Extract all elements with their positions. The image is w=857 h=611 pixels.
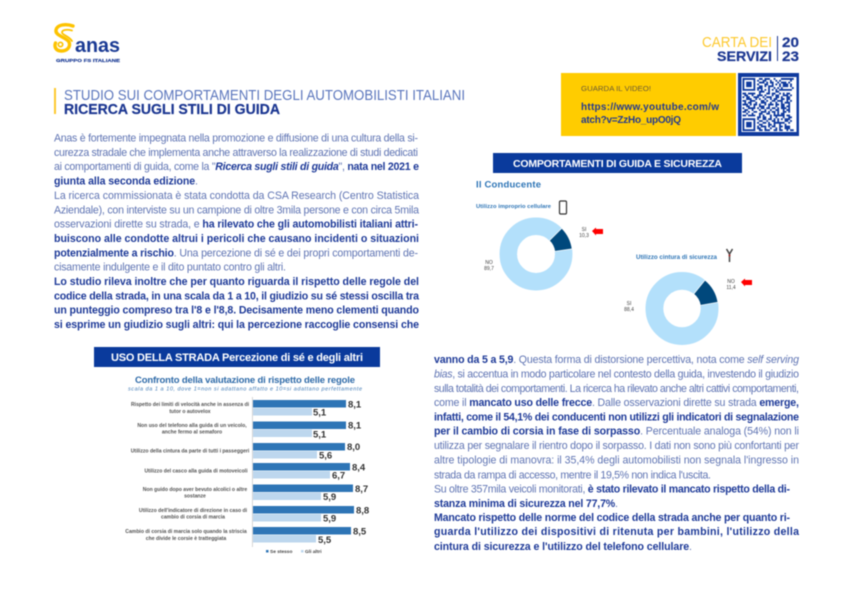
chart legend	[266, 549, 322, 555]
logo tagline: GRUPPO FS ITALIANE	[56, 58, 121, 64]
text block: right column: infatti, come il 54,1% dei conducenti non utilizzi gli indicatori di segnalazione	[434, 411, 799, 423]
row: uso del telefono: anche fermo al semaforo	[162, 430, 222, 436]
row: alcolici: Non guido dopo aver bevuto alcolici o altre	[143, 487, 247, 493]
label: si	[579, 227, 589, 239]
icon: seatbelt	[726, 249, 732, 262]
text block: left column: ai comportamenti di guida, come la "Ricerca sugli stili di guida", nata nel 2021 e	[54, 161, 419, 173]
label: no	[484, 260, 494, 272]
row: uso del telefono	[137, 420, 362, 440]
label: si: SI	[582, 227, 586, 233]
title	[54, 88, 465, 118]
video callout: atch?v=ZzHo_upO0jQ	[581, 115, 681, 126]
row: limiti di velocità: Rispetto dei limiti di velocità anche in assenza di	[131, 402, 250, 408]
carta dei servizi badge: SERVIZI	[717, 48, 772, 64]
carta dei servizi badge: 20	[782, 34, 799, 50]
text block: left column: curezza stradale che implementa anche attraverso la realizzazione di studi dedicati	[54, 147, 418, 159]
text block: right column: stanza minima di sicurezza nel 77,7%.	[434, 498, 618, 510]
text block: left column: Lo studio rileva inoltre che per quanto riguarda il rispetto delle regole del	[54, 276, 419, 288]
banner: comportamenti di guida	[493, 153, 742, 173]
donut chart: utilizzo cintura	[624, 249, 752, 336]
row: indicatore di direzione: 5,9	[323, 514, 336, 524]
icon: phone	[560, 201, 566, 214]
text block: left column: potenzialmente a rischio. Una percezione di sé e dei propri comportamenti de-	[54, 247, 418, 259]
title: STUDIO SUI COMPORTAMENTI DEGLI AUTOMOBILISTI ITALIANI	[64, 88, 465, 104]
label: si: SI	[627, 301, 631, 307]
text block: right column: utilizza per segnalare il rientro dopo il sorpasso. I dati non sono più confortanti per	[434, 440, 799, 452]
text block: right column: cintura di sicurezza e l'utilizzo del telefono cellulare.	[434, 541, 692, 553]
label: si	[624, 301, 634, 313]
label: no: 11,4	[726, 285, 736, 291]
row: alcolici: sostanze	[184, 494, 206, 500]
carta dei servizi badge	[702, 34, 799, 64]
row: cambio di corsia: Cambio di corsia di marcia solo quando la striscia	[125, 529, 247, 535]
logo wordmark: anas	[75, 35, 120, 57]
text block: right column: per il cambio di corsia in fase di sorpasso. Percentuale analoga (54%) non li	[434, 426, 799, 438]
row: indicatore di direzione: Utilizzo dell'indicatore di direzione in caso di	[139, 508, 248, 514]
carta dei servizi badge: CARTA DEI	[702, 35, 772, 51]
label: si: 10,3	[579, 233, 589, 239]
row: limiti di velocità: 5,1	[313, 408, 327, 418]
chart legend: Gli altri	[305, 549, 322, 555]
text block: left column: buiscono alle condotte altrui i pericoli che causano incidenti o situazioni	[54, 233, 419, 245]
row: cambio di corsia	[125, 526, 367, 546]
text block: right column: guarda l'utilizzo dei dispositivi di ritenuta per bambini, l'utilizzo della	[434, 526, 799, 538]
label: no: NO	[485, 260, 493, 266]
video callout: https://www.youtube.com/w	[581, 102, 719, 113]
logo: anas	[55, 25, 121, 64]
row: limiti di velocità	[131, 400, 362, 418]
chart label: Utilizzo cintura di sicurezza	[636, 254, 718, 261]
text block: right column: sulla totalità dei comportamenti. La ricerca ha rilevato anche altri cattivi comportamenti,	[434, 383, 799, 395]
label: no: NO	[727, 279, 735, 285]
text block: right column: Mancato rispetto delle norme del codice della strada anche per quanto ri-	[434, 512, 790, 524]
row: uso del telefono: 8,1	[348, 420, 362, 432]
row: alcolici: 8,7	[355, 484, 368, 495]
text block: left column: osservazioni dirette su strada, e ha rilevato che gli automobilisti italiani attri-	[54, 219, 418, 231]
banner: comportamenti di guida: COMPORTAMENTI DI GUIDA E SICUREZZA	[513, 158, 722, 170]
row: indicatore di direzione: 8,8	[356, 506, 369, 516]
text block: left column: giunta alla seconda edizione.	[54, 176, 198, 188]
row: indicatore di direzione: cambio di corsia di marcia	[161, 514, 225, 520]
label: no: 89,7	[484, 266, 494, 272]
row: alcolici: 5,9	[323, 492, 336, 503]
row: cintura di sicurezza: 5,6	[319, 450, 332, 462]
text block: left column: Anas è fortemente impegnata nella promozione e diffusione di una cultura della si-	[54, 132, 418, 144]
row: limiti di velocità: 8,1	[348, 400, 362, 410]
chart legend: Se stesso	[270, 549, 292, 555]
label: si: 88,4	[624, 307, 634, 313]
text block: left column: cisamente indulgente e il dito puntato contro gli altri.	[54, 262, 286, 274]
text block: right column: vanno da 5 a 5,9. Questa forma di distorsione percettiva, nota come self serving	[434, 354, 799, 366]
video callout	[561, 73, 736, 136]
row: cintura di sicurezza: Utilizzo della cintura da parte di tutti i passeggeri	[131, 448, 250, 454]
row: casco: 6,7	[332, 470, 345, 482]
text block: right column: strada da rampa di accesso, mentre il 19,5% non indica l'uscita.	[434, 470, 711, 482]
row: cambio di corsia: 5,5	[318, 535, 332, 546]
row: casco: Utilizzo del casco alla guida di motoveicoli	[144, 468, 248, 474]
icon: yellow S swirl	[55, 25, 73, 51]
carta dei servizi badge: 23	[782, 48, 799, 64]
text block: right column	[434, 354, 799, 553]
row: cintura di sicurezza: 8,0	[347, 442, 360, 453]
text block: left column: un punteggio compreso tra l'8 e l'8,8. Decisamente meno clementi quando	[54, 305, 420, 317]
row: casco	[144, 462, 366, 482]
row: cambio di corsia: 8,5	[353, 526, 367, 538]
label: no	[726, 279, 736, 291]
bar chart: confronto valutazione	[125, 375, 369, 555]
row: limiti di velocità: tutor o autovelox	[169, 409, 211, 415]
chart label: Utilizzo improprio cellulare	[476, 204, 552, 210]
text block: left column: codice della strada, in una scala da 1 a 10, il giudizio su sé stessi oscilla tra	[54, 290, 419, 302]
video callout: GUARDA IL VIDEO!	[581, 84, 651, 93]
heading: il conducente: Il Conducente	[476, 180, 541, 190]
row: uso del telefono: Non uso del telefono alla guida di un veicolo,	[137, 423, 247, 429]
row: indicatore di direzione	[139, 506, 369, 524]
title: RICERCA SUGLI STILI DI GUIDA	[64, 101, 280, 118]
row: cintura di sicurezza	[131, 442, 360, 462]
donut chart: utilizzo improprio cellulare	[476, 201, 603, 282]
text block: left column	[54, 132, 420, 331]
text block: right column: bias, si accentua in modo particolare nel contesto della guida, investendo il giudizio	[434, 368, 799, 380]
arrow: red	[592, 228, 603, 236]
text block: left column: si esprime un giudizio sugli altri: qui la percezione raccoglie consensi che	[54, 319, 419, 331]
chart subtitle: scala da 1 a 10, dove 1=non si adattano affatto e 10=si adattano perfettamente	[128, 386, 362, 392]
text block: right column: come il mancato uso delle frecce. Dalle osservazioni dirette su strada emerge,	[434, 397, 799, 409]
arrow: red	[741, 278, 752, 286]
row: casco: 8,4	[352, 462, 366, 474]
text block: left column: La ricerca commissionata è stata condotta da CSA Research (Centro Statistica	[54, 190, 419, 202]
banner: uso della strada: USO DELLA STRADA Percezione di sé e degli altri	[111, 352, 363, 364]
text block: right column: altre tipologie di manovra: il 35,4% degli automobilisti non segnala l'ingresso in	[434, 454, 799, 466]
text block: right column: Su oltre 357mila veicoli monitorati, è stato rilevato il mancato rispetto della di-	[434, 484, 790, 496]
row: uso del telefono: 5,1	[313, 430, 327, 440]
row: cambio di corsia: che divide le corsie è tratteggiata	[146, 536, 226, 542]
icon: QR code	[738, 73, 799, 136]
banner: uso della strada	[94, 347, 380, 367]
row: alcolici	[143, 484, 368, 503]
text block: left column: Aziendale), con interviste su un campione di oltre 3mila persone e con circa 5mila	[54, 204, 419, 216]
chart title: Confronto della valutazione di rispetto delle regole	[135, 375, 355, 386]
